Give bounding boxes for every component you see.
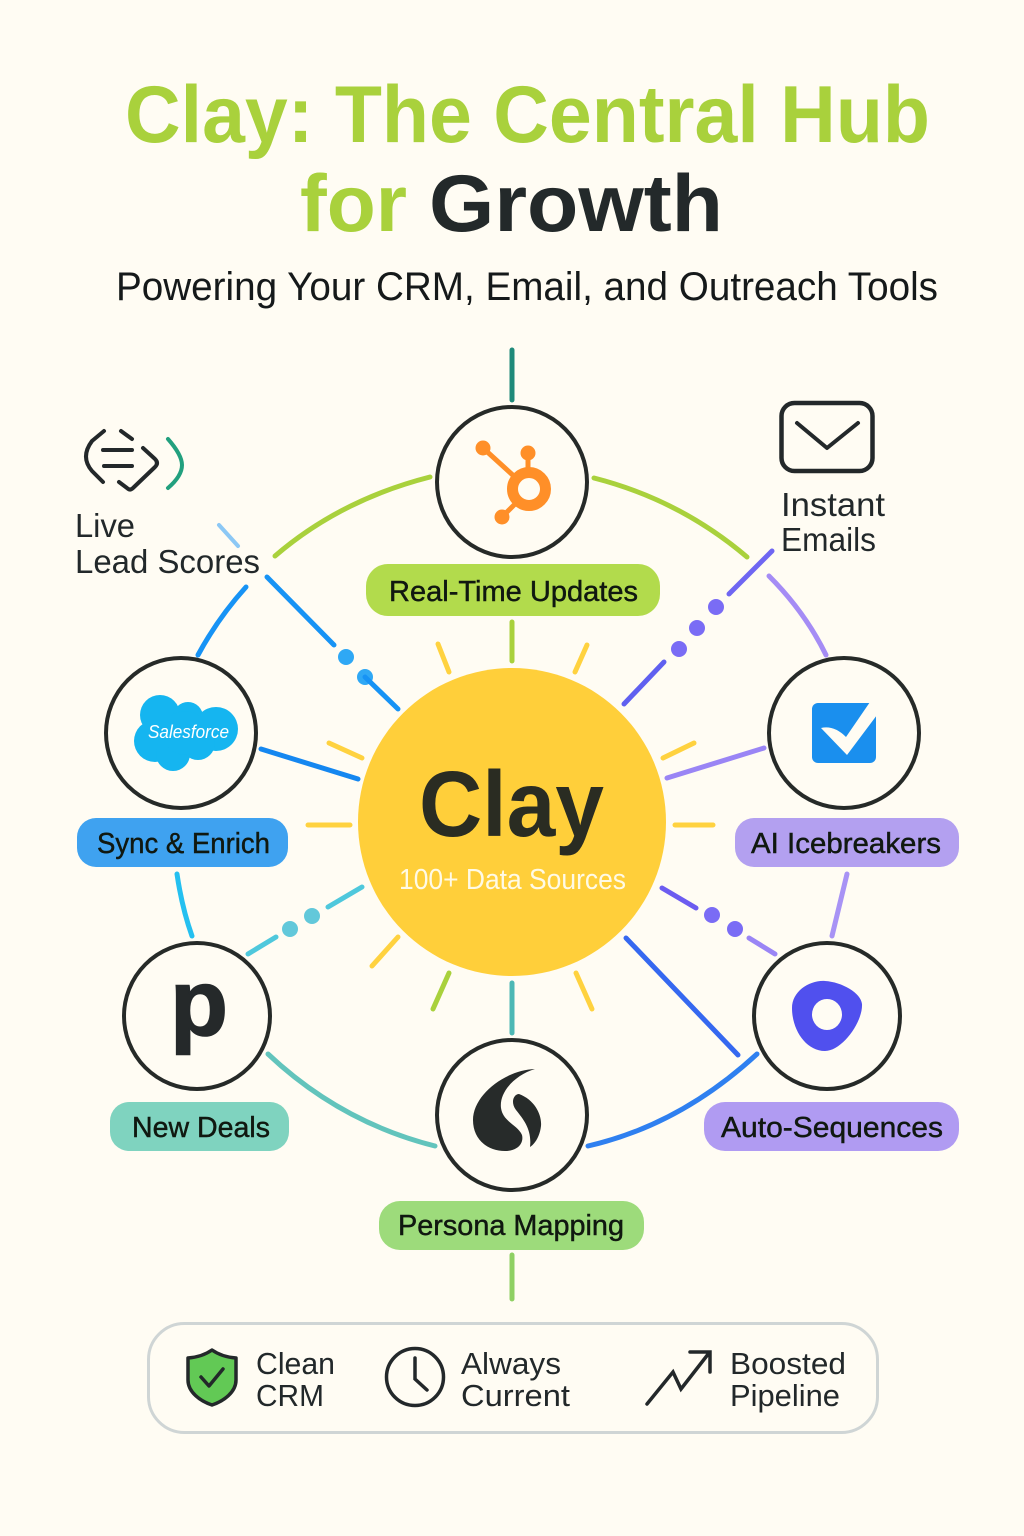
label: Live Lead Scores: Lead Scores xyxy=(75,543,260,580)
pill: AI Icebreakers: AI Icebreakers xyxy=(751,828,941,860)
icon: Pipedrive p: p xyxy=(170,950,228,1055)
label: Instant Emails: Emails xyxy=(781,521,876,558)
pill: New Deals xyxy=(110,1102,289,1151)
title: Growth xyxy=(429,159,723,249)
central hub: Clay xyxy=(358,668,666,976)
pill: New Deals: New Deals xyxy=(132,1112,270,1144)
pill: Persona Mapping xyxy=(379,1201,644,1250)
panel: outcomes xyxy=(148,1324,878,1432)
icon: S swirl xyxy=(473,1069,541,1151)
text: Always Current xyxy=(461,1346,570,1413)
sun rays xyxy=(308,644,713,1009)
node: Outreach xyxy=(754,943,900,1089)
title: Clay: The Central Hub xyxy=(125,70,930,160)
icon: growth arrow xyxy=(647,1352,710,1404)
pill: Sync & Enrich xyxy=(77,818,288,867)
label: Live Lead Scores: Live xyxy=(75,507,135,544)
text: Clean CRM: CRM xyxy=(256,1378,324,1413)
icon: clock xyxy=(386,1348,444,1406)
icon: envelope xyxy=(782,403,872,471)
label: Instant Emails xyxy=(781,486,885,558)
node: Salesforce xyxy=(106,658,256,808)
icon: HubSpot sprocket xyxy=(476,440,546,524)
title xyxy=(125,70,930,249)
text: Clean CRM: Clean xyxy=(256,1346,335,1381)
pill: Real-Time Updates: Real-Time Updates xyxy=(389,576,638,608)
pill: AI Icebreakers xyxy=(735,818,959,867)
pill: Sync & Enrich: Sync & Enrich xyxy=(97,828,270,860)
pill: Auto-Sequences: Auto-Sequences xyxy=(721,1112,943,1144)
text: Always Current: Current xyxy=(461,1378,570,1413)
icon: Outreach blob xyxy=(792,981,862,1051)
node: Pipedrive xyxy=(124,943,270,1089)
node: HubSpot xyxy=(437,407,587,557)
subtitle: Powering Your CRM, Email, and Outreach Tools xyxy=(116,265,938,309)
text: Always Current: Always xyxy=(461,1346,561,1381)
central hub: Clay: Clay xyxy=(419,752,604,856)
node: Persona Mapping xyxy=(437,1040,587,1190)
icon: shield xyxy=(188,1350,236,1405)
title: for xyxy=(300,159,407,249)
pill: Persona Mapping: Persona Mapping xyxy=(398,1210,624,1242)
central hub: Clay: 100+ Data Sources xyxy=(399,864,626,896)
icon: Live Lead Scores xyxy=(86,431,182,490)
text: Boosted Pipeline: Pipeline xyxy=(730,1378,840,1413)
pill: Auto-Sequences xyxy=(704,1102,959,1151)
node: Checkmark app xyxy=(769,658,919,808)
label: Instant Emails: Instant xyxy=(781,486,885,523)
icon: blue check box xyxy=(812,702,877,763)
label: Live Lead Scores xyxy=(75,507,260,580)
icon: Salesforce cloud: Salesforce xyxy=(148,722,229,742)
text: Boosted Pipeline xyxy=(730,1346,846,1413)
icon: Salesforce cloud xyxy=(134,695,238,771)
pill: Real-Time Updates xyxy=(366,564,660,616)
connector lines and dots xyxy=(177,350,847,1299)
text: Boosted Pipeline: Boosted xyxy=(730,1346,846,1381)
text: Clean CRM xyxy=(256,1346,335,1413)
